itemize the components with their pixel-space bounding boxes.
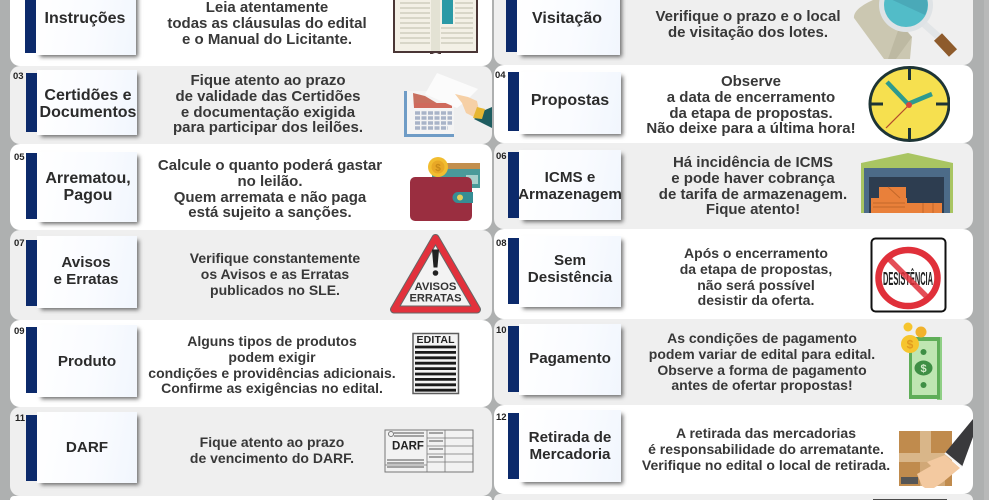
text: ICMS e Armazenagem: Há incidência de ICMS xyxy=(673,154,833,171)
text: Retirada de Mercadoria xyxy=(642,425,890,473)
text: Certidões: e documentação exigida xyxy=(181,104,355,121)
panel: 05 Arrematou, Pagou xyxy=(10,144,492,230)
panel: 06 ICMS e Armazenagem xyxy=(494,143,973,229)
text: Pagamento xyxy=(649,330,875,393)
label: Avisos e Erratas: e Erratas xyxy=(53,270,118,288)
panel: 02 Visitação xyxy=(494,0,973,65)
icon: open book xyxy=(393,0,478,54)
label: Retirada de Mercadoria: Mercadoria xyxy=(529,446,611,462)
icon: banknotes and coins: $ xyxy=(907,338,914,352)
text: Propostas: Não deixe para a última hora! xyxy=(646,120,856,137)
text: Instruções: e o Manual do Licitante. xyxy=(182,31,352,48)
icon: wallet: $ xyxy=(435,163,441,174)
label: Visitação: Visitação xyxy=(532,10,602,27)
panel: row 7 right xyxy=(494,494,973,500)
label: Certidões e Documentos: Certidões e xyxy=(44,86,132,104)
text: DARF: Fique atento ao prazo xyxy=(200,434,344,450)
icon: clock xyxy=(868,66,950,142)
label card: Arrematou, Pagou xyxy=(37,152,137,222)
number: 04: 04 xyxy=(495,70,506,81)
label: Arrematou, Pagou: Pagou xyxy=(64,186,112,204)
text: Retirada de Mercadoria: A retirada das mercadorias xyxy=(676,425,856,441)
text: Avisos e Erratas: os Avisos e as Erratas xyxy=(201,266,349,282)
panel: 07 Avisos e Erratas xyxy=(10,230,492,320)
icon: magnifying glass xyxy=(854,0,957,59)
panel: 09 Produto xyxy=(10,320,492,407)
text: Sem Desistência: não será possível xyxy=(697,277,815,293)
number: 05: 05 xyxy=(14,152,25,163)
label: ICMS e Armazenagem xyxy=(518,169,622,203)
label: Avisos e Erratas: Avisos xyxy=(61,254,111,270)
icon: dark top edge of the next icon xyxy=(873,499,947,500)
text: Pagamento: As condições de pagamento xyxy=(667,330,857,346)
panel: 04 Propostas xyxy=(494,65,973,143)
label: Avisos e Erratas xyxy=(53,254,118,288)
number: 07: 07 xyxy=(14,238,25,249)
text: Produto xyxy=(148,333,396,396)
text: Visitação: Verifique o prazo e o local xyxy=(655,8,841,25)
label: Arrematou, Pagou xyxy=(45,170,131,204)
label card: Sem Desistência xyxy=(519,236,621,307)
panel: 12 Retirada de Mercadoria xyxy=(494,405,973,494)
label: Propostas: Propostas xyxy=(531,92,609,108)
text: Arrematou, Pagou: Calcule o quanto poderá gastar xyxy=(158,157,382,174)
icon: wallet xyxy=(410,157,480,221)
text: Sem Desistência: da etapa de propostas, xyxy=(680,261,832,277)
text: Produto: condições e providências adicionais. xyxy=(148,365,396,381)
label card: DARF xyxy=(37,412,137,483)
text: Produto: Alguns tipos de produtos xyxy=(187,333,357,349)
panel: 11 DARF xyxy=(10,407,492,496)
text: Instruções xyxy=(167,0,367,48)
text: Produto: Confirme as exigências no edital. xyxy=(161,380,383,396)
text: Produto: podem exigir xyxy=(228,349,316,365)
label: ICMS e Armazenagem: ICMS e xyxy=(545,169,595,186)
text: Avisos e Erratas xyxy=(190,250,360,298)
number: 12: 12 xyxy=(496,412,507,423)
icon: banknotes and coins: $ xyxy=(920,363,927,375)
text: Sem Desistência: Após o encerramento xyxy=(684,245,828,261)
text: Certidões: de validade das Certidões xyxy=(175,88,361,105)
text: Arrematou, Pagou: está sujeito a sanções. xyxy=(188,204,352,221)
label card: Visitação xyxy=(517,0,620,54)
label: Certidões e Documentos xyxy=(40,86,136,120)
number: 06: 06 xyxy=(496,151,507,162)
text: ICMS e Armazenagem xyxy=(659,154,847,218)
icon: edital document xyxy=(412,332,460,394)
number: 10: 10 xyxy=(496,325,507,336)
text: Visitação xyxy=(655,8,841,41)
icon: warning triangle: AVISOS xyxy=(414,281,456,293)
text: Pagamento: Observe a forma de pagamento xyxy=(657,362,867,378)
label card: Propostas xyxy=(519,72,621,134)
label card: Certidões e Documentos xyxy=(37,70,137,135)
label: Pagamento: Pagamento xyxy=(529,350,611,366)
label card: Avisos e Erratas xyxy=(37,236,137,308)
label: Retirada de Mercadoria: Retirada de xyxy=(529,428,611,446)
label card: ICMS e Armazenagem xyxy=(519,150,621,220)
text: ICMS e Armazenagem: Fique atento! xyxy=(706,201,800,218)
label: Produto: Produto xyxy=(58,352,116,370)
label card: Instruções xyxy=(36,0,136,55)
text: Propostas: da etapa de propostas. xyxy=(669,105,833,122)
text: Arrematou, Pagou: Quem arremata e não paga xyxy=(174,189,366,206)
text: Propostas: Observe xyxy=(721,73,781,90)
label: ICMS e Armazenagem: Armazenagem xyxy=(518,186,622,203)
label: Sem Desistência: Sem xyxy=(554,252,586,268)
text: Retirada de Mercadoria: é responsabilidade do arrematante. xyxy=(648,441,884,457)
panel: 01 Instruções xyxy=(10,0,492,66)
text: Certidões: para participar dos leilões. xyxy=(173,119,363,136)
icon: hand with parcel xyxy=(899,419,973,488)
icon: no-withdrawal sign xyxy=(870,238,946,312)
number: 08: 08 xyxy=(496,238,507,249)
label: Arrematou, Pagou: Arrematou, xyxy=(45,170,131,186)
label: Sem Desistência xyxy=(528,252,612,286)
text: Sem Desistência: desistir da oferta. xyxy=(698,292,814,308)
icon: edital document: EDITAL xyxy=(416,334,455,346)
label: Instruções: Instruções xyxy=(45,10,125,27)
icon: calendar and hand xyxy=(404,73,492,137)
icon: DARF form: DARF xyxy=(392,440,424,452)
label card: Produto xyxy=(37,325,137,397)
text: ICMS e Armazenagem: e pode haver cobrança xyxy=(671,170,835,187)
text: Propostas xyxy=(646,73,856,137)
text: Certidões: Fique atento ao prazo xyxy=(190,72,346,89)
label: Certidões e Documentos: Documentos xyxy=(40,104,136,120)
text: Avisos e Erratas: Verifique constantemente xyxy=(190,250,360,266)
text: DARF: de vencimento do DARF. xyxy=(190,450,354,466)
text: DARF xyxy=(190,434,354,466)
label: Retirada de Mercadoria xyxy=(529,428,611,462)
panel: 08 Sem Desistência xyxy=(494,229,973,319)
text: Instruções: todas as cláusulas do edital xyxy=(167,15,367,32)
label: Sem Desistência: Desistência xyxy=(528,268,612,286)
number: 11: 11 xyxy=(15,413,25,424)
text: Retirada de Mercadoria: Verifique no edital o local de retirada. xyxy=(642,457,890,473)
label card: Pagamento xyxy=(519,324,621,395)
label card: Retirada de Mercadoria xyxy=(519,410,621,482)
icon: banknotes and coins xyxy=(901,322,942,400)
icon: warning triangle: ERRATAS xyxy=(410,292,462,304)
panel: row 7 left xyxy=(10,496,492,500)
text: Pagamento: podem variar de edital para edital. xyxy=(649,346,875,362)
panel: 10 Pagamento xyxy=(494,319,973,405)
text: Pagamento: antes de ofertar propostas! xyxy=(671,377,853,393)
icon: DARF form xyxy=(384,430,474,472)
text: Visitação: de visitação dos lotes. xyxy=(668,24,828,41)
icon: warehouse with boxes xyxy=(861,153,953,213)
text: Arrematou, Pagou xyxy=(158,157,382,221)
text: Avisos e Erratas: publicados no SLE. xyxy=(210,282,340,298)
icon: warning triangle xyxy=(390,234,481,314)
label: DARF: DARF xyxy=(66,438,108,456)
panel: 03 Certidões e Documentos xyxy=(10,66,492,144)
text: Arrematou, Pagou: no leilão. xyxy=(237,173,302,190)
number: 03: 03 xyxy=(13,71,24,82)
text: Propostas: a data de encerramento xyxy=(667,89,835,106)
text: Sem Desistência xyxy=(680,245,832,308)
number: 09: 09 xyxy=(14,326,25,337)
text: Certidões xyxy=(173,72,363,136)
text: ICMS e Armazenagem: de tarifa de armazenagem. xyxy=(659,186,847,203)
